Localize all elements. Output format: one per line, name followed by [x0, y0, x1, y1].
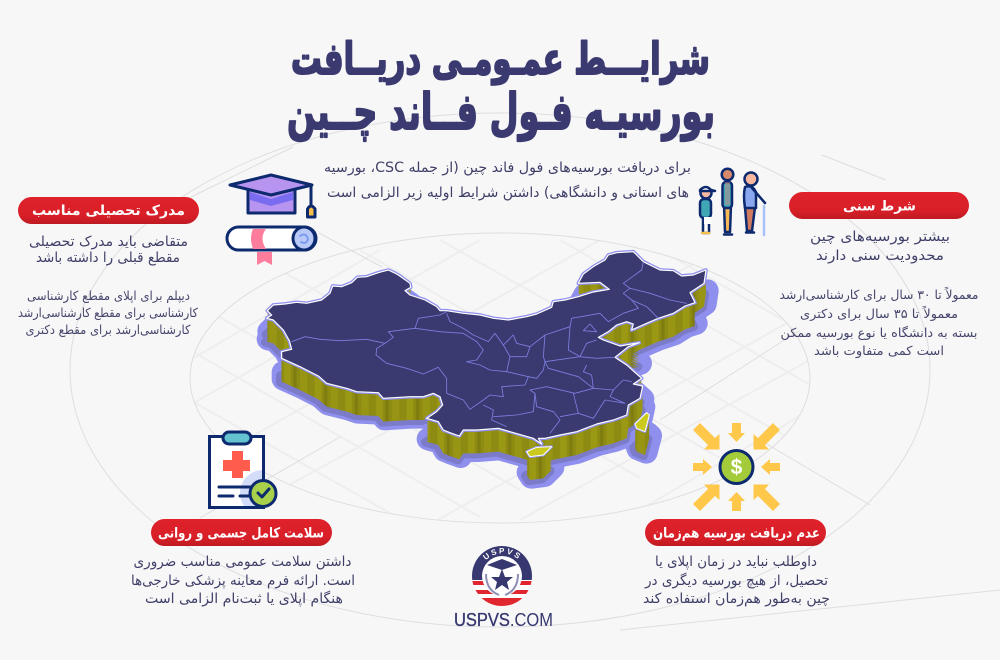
panel: age: [700, 169, 979, 359]
text: age detail: معمولاً تا ۳۵ سال برای دکتری: [800, 305, 958, 322]
text: degree main: متقاضی باید مدرک تحصیلی: [29, 234, 188, 250]
map province borders: [292, 262, 687, 433]
heading pill: age: شرط سنی: [843, 198, 916, 214]
text: no simultaneous scholarship: چین به‌طور هم‌زمان استفاده کند: [643, 591, 830, 607]
panel: degree: [18, 175, 316, 338]
text: age detail: بسته به دانشگاه یا نوع بورسیه ممکن: [780, 325, 978, 341]
text: age detail: [780, 286, 979, 359]
icon: graduation cap and diploma: [227, 175, 316, 265]
intro text: [324, 160, 691, 201]
intro text: برای دریافت بورسیه‌های فول فاند چین (از جمله CSC، بورسیه: [324, 160, 691, 176]
logo text: USPVS.COM: [454, 610, 553, 630]
text: age detail: معمولاً تا ۳۰ سال برای کارشناسی‌ارشد: [780, 286, 979, 303]
map top surface: [267, 252, 706, 457]
heading pill: health: [151, 519, 332, 546]
text: degree detail: دیپلم برای اپلای مقطع کارشناسی: [27, 288, 190, 304]
text: degree main: مقطع قبلی را داشته باشد: [36, 250, 180, 266]
title: [287, 34, 715, 142]
title: شرایـــط عمـومـی دریــافت: [291, 34, 710, 85]
text: age main: بیشتر بورسیه‌های چین: [810, 229, 950, 245]
panel: no simultaneous scholarship: [643, 423, 830, 607]
text: no simultaneous scholarship: تحصیل، از هیچ بورسیه دیگری در: [644, 572, 828, 589]
map extruded walls: [267, 253, 706, 480]
text: age main: [810, 229, 950, 264]
intro text: های استانی و دانشگاهی) داشتن شرایط اولیه زیر الزامی است: [327, 184, 689, 201]
logo: [454, 546, 553, 630]
text: no simultaneous scholarship: [643, 554, 830, 607]
text: degree detail: [18, 288, 198, 338]
text: degree main: [29, 234, 188, 266]
heading pill: health: سلامت کامل جسمی و روانی: [158, 526, 324, 542]
map of China: [265, 252, 707, 481]
text: degree detail: کارشناسی‌ارشد برای مقطع دکتری: [26, 322, 191, 338]
heading pill: age: [789, 192, 969, 219]
panel: health: [131, 432, 355, 607]
background: [70, 112, 1000, 630]
icon: three people: [700, 169, 765, 235]
heading pill: no simultaneous scholarship: عدم دریافت بورسیه هم‌زمان: [653, 526, 820, 542]
icon: dollar coin with inward arrows: [693, 423, 780, 511]
text: health: داشتن سلامت عمومی مناسب ضروری: [134, 554, 352, 570]
title: بورسیـه فـول فــاند چــین: [287, 83, 715, 142]
heading pill: degree: [18, 197, 199, 224]
icon: dollar coin with inward arrows: $: [731, 456, 743, 479]
text: age detail: است کمی متفاوت باشد: [814, 343, 944, 359]
text: health: [131, 554, 355, 607]
logo badge: USPVS: [482, 548, 520, 560]
text: health: هنگام اپلای یا ثبت‌نام الزامی است: [145, 590, 343, 607]
icon: medical clipboard: [208, 430, 278, 509]
text: age main: محدودیت سنی دارند: [816, 248, 944, 264]
map halo: [265, 272, 707, 481]
text: health: است. ارائه فرم معاینه پزشکی خارجی‌ها: [131, 573, 355, 589]
text: no simultaneous scholarship: داوطلب نباید در زمان اپلای یا: [655, 554, 817, 570]
heading pill: no simultaneous scholarship: [645, 519, 826, 546]
text: degree detail: کارشناسی برای مقطع کارشناسی‌ارشد: [18, 305, 198, 321]
heading pill: degree: مدرک تحصیلی مناسب: [32, 203, 185, 219]
